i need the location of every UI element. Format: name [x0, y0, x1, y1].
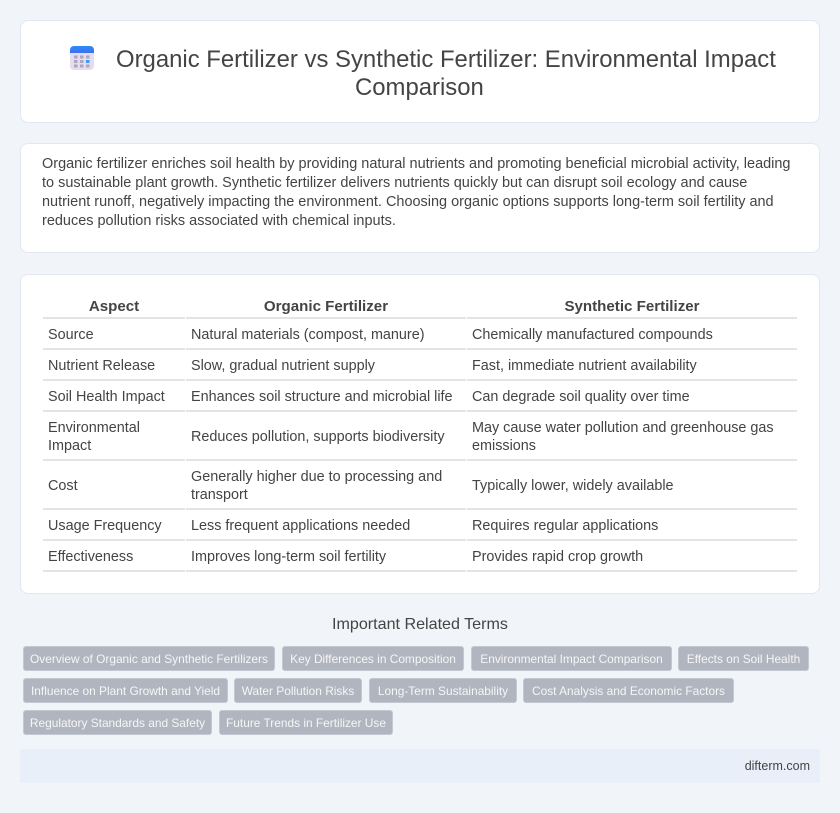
tags: related terms	[23, 646, 809, 735]
text block: summary: Organic fertilizer enriches soil health by providing natural nutrients and promoting beneficial microbial activity, leading	[42, 156, 790, 172]
tag	[678, 646, 809, 671]
footer bar	[20, 749, 820, 783]
row: Nutrient Release: Slow, gradual nutrient supply	[191, 358, 375, 374]
row: Environmental Impact: May cause water pollution and greenhouse gas	[472, 420, 774, 436]
text block: summary: nutrient runoff, negatively impacting the environment. Choosing organic options supports long-term soil fertility and	[42, 194, 774, 210]
row: Source: Source	[48, 327, 94, 343]
table header: Aspect: Aspect	[89, 298, 139, 315]
tag	[471, 646, 672, 671]
panel: title header	[20, 20, 820, 123]
tag: Regulatory Standards and Safety	[30, 716, 205, 730]
tag	[369, 678, 517, 703]
row: Source: Natural materials (compost, manure)	[191, 327, 425, 343]
row: Nutrient Release	[48, 358, 697, 374]
row: Source: Chemically manufactured compounds	[472, 327, 713, 343]
tag	[23, 710, 212, 735]
row: Cost: Typically lower, widely available	[472, 478, 674, 494]
row: Soil Health Impact: Can degrade soil quality over time	[472, 389, 690, 405]
tag	[219, 710, 393, 735]
row: Effectiveness: Effectiveness	[48, 549, 133, 565]
panel: summary paragraph	[20, 143, 820, 253]
row: Effectiveness	[48, 549, 643, 565]
tag: Long-Term Sustainability	[378, 684, 508, 698]
row: Usage Frequency	[48, 518, 658, 534]
tag	[282, 646, 464, 671]
row: Cost: transport	[191, 487, 248, 503]
tag: Overview of Organic and Synthetic Fertilizers	[30, 652, 268, 666]
icon: calendar	[70, 46, 94, 70]
row: Nutrient Release: Fast, immediate nutrient availability	[472, 358, 697, 374]
row: Usage Frequency: Usage Frequency	[48, 518, 162, 534]
row: Soil Health Impact	[48, 389, 690, 405]
tag	[523, 678, 734, 703]
tag: Water Pollution Risks	[242, 684, 354, 698]
text block: summary	[42, 156, 790, 229]
row: Usage Frequency: Less frequent applications needed	[191, 518, 410, 534]
row: Cost: Cost	[48, 478, 78, 494]
panel: comparison table	[20, 274, 820, 594]
tag	[234, 678, 362, 703]
row: Soil Health Impact: Enhances soil structure and microbial life	[191, 389, 453, 405]
row: Soil Health Impact: Soil Health Impact	[48, 389, 165, 405]
row: Effectiveness: Provides rapid crop growth	[472, 549, 643, 565]
row: Environmental Impact	[48, 420, 774, 454]
heading: related terms: Important Related Terms	[332, 615, 508, 633]
tag: Key Differences in Composition	[290, 652, 456, 666]
tag: Future Trends in Fertilizer Use	[226, 716, 386, 730]
row: Cost	[48, 469, 674, 503]
tag: Effects on Soil Health	[687, 652, 800, 666]
title: Organic Fertilizer vs Synthetic Fertilizer: Environmental Impact	[116, 46, 776, 73]
table header: Synthetic Fertilizer: Synthetic Fertilizer	[564, 298, 700, 315]
row: Environmental Impact: Environmental	[48, 420, 140, 436]
text block: summary: reduces pollution risks associated with chemical inputs.	[42, 213, 396, 229]
row: Environmental Impact: Impact	[48, 438, 91, 454]
row: Cost: Generally higher due to processing and	[191, 469, 442, 485]
row: Nutrient Release: Nutrient Release	[48, 358, 155, 374]
tag: Influence on Plant Growth and Yield	[31, 684, 220, 698]
row: Environmental Impact: emissions	[472, 438, 536, 454]
tag: Environmental Impact Comparison	[480, 652, 663, 666]
table header: Organic Fertilizer: Organic Fertilizer	[264, 298, 388, 315]
title: Comparison	[355, 74, 484, 101]
row: Source	[48, 327, 713, 343]
tag	[23, 678, 228, 703]
text block: summary: to sustainable plant growth. Synthetic fertilizer delivers nutrients quickly but can disrupt soil ecology and cause	[42, 175, 747, 191]
title	[116, 46, 776, 101]
row: Environmental Impact: Reduces pollution, supports biodiversity	[191, 429, 445, 445]
tag	[23, 646, 275, 671]
row: Usage Frequency: Requires regular applications	[472, 518, 658, 534]
tag: Cost Analysis and Economic Factors	[532, 684, 725, 698]
row: Effectiveness: Improves long-term soil fertility	[191, 549, 386, 565]
footer credit: difterm.com	[745, 759, 810, 773]
